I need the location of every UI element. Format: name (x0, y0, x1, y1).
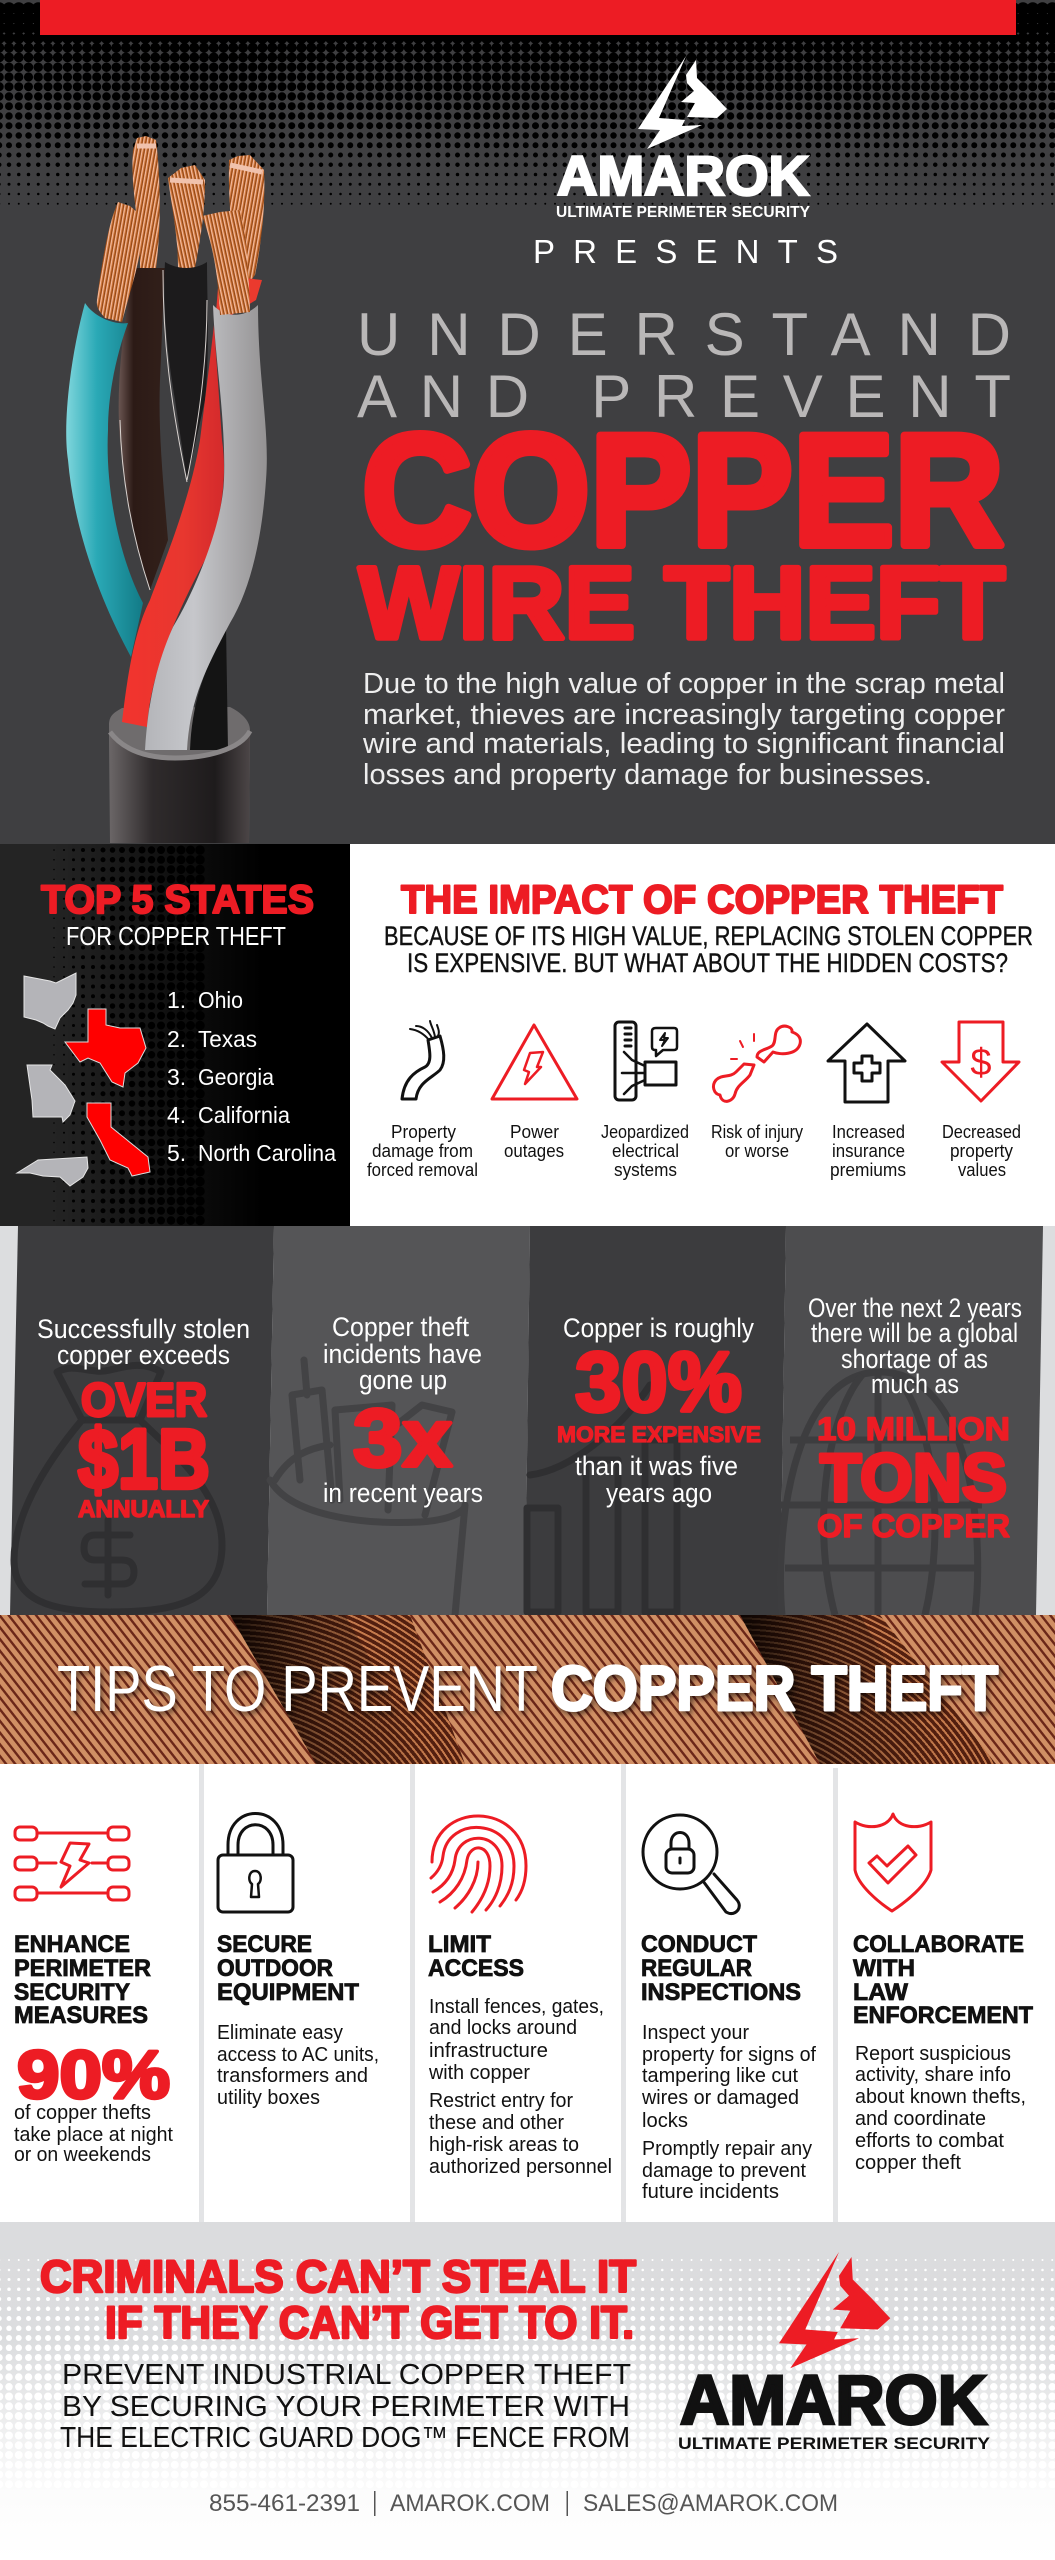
tip 2 heading (217, 1931, 359, 2006)
stat column 1: stolen copper (10, 1226, 274, 1615)
panel: the impact of copper theft (350, 844, 1055, 1226)
banner: tips to prevent copper theft (0, 1615, 1055, 1764)
stat text: incidents: 3x (353, 1393, 452, 1484)
stat text: incidents: Copper theft (332, 1312, 469, 1342)
tip 5 body: and coordinate (855, 2108, 986, 2130)
intro paragraph: losses and property damage for businesses. (363, 759, 932, 791)
stat text: stolen copper: copper exceeds (57, 1340, 230, 1370)
stat text: shortage: much as (871, 1369, 959, 1399)
logo: AMAROK white (556, 56, 810, 221)
title line: wire theft: WIRE THEFT (359, 546, 1005, 660)
tip 4 body: property for signs of (642, 2044, 816, 2066)
icon: property value down arrow: $ (970, 1042, 992, 1084)
tip 2 heading: EQUIPMENT (217, 1979, 359, 2006)
tip 3 body: infrastructure (429, 2040, 548, 2062)
banner title: bold part: COPPER THEFT (551, 1654, 998, 1724)
tip 4 body: future incidents (642, 2181, 779, 2203)
call to action text: THE ELECTRIC GUARD DOG™ FENCE FROM (60, 2422, 630, 2454)
stat text: stolen copper: Successfully stolen (37, 1314, 250, 1344)
icon: property value down arrow (942, 1022, 1019, 1101)
ranked state list: 5. (167, 1140, 186, 1166)
icon: fingerprint (431, 1816, 526, 1912)
tip 5 body: activity, share info (855, 2064, 1011, 2086)
illustration: copper cable with stripped wires (66, 136, 267, 843)
tip 1 heading: MEASURES (14, 2002, 148, 2029)
stat text: shortage: TONS (820, 1440, 1007, 1516)
stat column 2: incidents (267, 1226, 530, 1615)
tip 3 heading: ACCESS (428, 1955, 524, 1982)
background icon: money bag (14, 1365, 222, 1612)
tip 3 body: with copper (428, 2062, 530, 2084)
stat column 4: shortage (780, 1226, 1043, 1615)
stat text: incidents (323, 1312, 483, 1508)
tip 1 heading: PERIMETER (14, 1955, 151, 1982)
impact labels (367, 1122, 1021, 1180)
impact labels: electrical (612, 1141, 679, 1161)
ranked state list: 1. (167, 987, 186, 1013)
banner title: light part: TIPS TO PREVENT (57, 1652, 538, 1725)
stat text: stolen copper: $1B (78, 1412, 210, 1506)
tip 3 body: high-risk areas to (429, 2134, 579, 2156)
logo icon: red wolf and bolt (779, 2252, 890, 2368)
tip 1 heading: SECURITY (14, 1979, 130, 2006)
icon: electric fence (15, 1827, 129, 1900)
ranked state list: California (198, 1102, 290, 1128)
tip 5 heading: LAW (853, 1979, 908, 2006)
stat text: stolen copper: ANNUALLY (78, 1496, 209, 1523)
tip 3 body: and locks around (429, 2017, 577, 2039)
headline: criminals can't steal it: CRIMINALS CAN’T STEAL IT (40, 2251, 636, 2302)
impact labels: Increased (832, 1122, 905, 1142)
contact details: AMAROK.COM (390, 2490, 550, 2517)
tip 2 body: transformers and (217, 2065, 368, 2087)
title line: copper: COPPER (362, 401, 1004, 579)
icon: insurance premium up arrow (828, 1024, 905, 1102)
top red bar (40, 0, 1016, 35)
stat column 3: price (525, 1226, 786, 1615)
tip 5 body (855, 2043, 1026, 2174)
intro paragraph (362, 668, 1005, 791)
tip 1: perimeter security (14, 1827, 173, 2166)
intro paragraph: Due to the high value of copper in the scrap metal (363, 668, 1005, 700)
tip 4 heading (641, 1931, 801, 2006)
tip 4 body: locks (642, 2110, 688, 2132)
subheading: for copper theft: FOR COPPER THEFT (66, 921, 286, 951)
tip 2 body: Eliminate easy (217, 2022, 343, 2044)
title (357, 301, 1011, 660)
headline: criminals can't steal it: IF THEY CAN’T GET TO IT. (105, 2297, 634, 2348)
panel: statistics band (0, 1226, 1055, 1616)
tip 3 heading: LIMIT (428, 1931, 491, 1958)
title line: understand: UNDERSTAND (357, 301, 1011, 368)
impact labels: insurance (832, 1141, 905, 1161)
logo wordmark: AMAROK (557, 144, 809, 207)
tip 5: law enforcement (853, 1814, 1033, 2174)
panel: five tips (0, 1764, 1055, 2222)
logo wordmark: AMAROK (680, 2361, 987, 2439)
panel: call to action footer (0, 2222, 1055, 2560)
tip 4 heading: INSPECTIONS (641, 1979, 801, 2006)
icon: power outage triangle (492, 1025, 577, 1099)
headline: criminals can't steal it (40, 2251, 636, 2348)
tip 5 body: copper theft (855, 2152, 961, 2174)
intro paragraph: market, thieves are increasingly targeting copper (363, 699, 1005, 731)
call to action text: BY SECURING YOUR PERIMETER WITH (62, 2391, 630, 2423)
tip 3 body: Install fences, gates, (429, 1996, 604, 2018)
tip 5 body: about known thefts, (855, 2086, 1026, 2108)
impact labels: forced removal (367, 1160, 478, 1180)
ranked state list: Texas (198, 1026, 257, 1052)
heading: top 5 states: TOP 5 STATES (41, 878, 314, 922)
map: North Carolina (17, 1157, 88, 1186)
presents label: PRESENTS (533, 233, 838, 270)
stat text: price: 30% (575, 1335, 742, 1429)
logo tagline: ULTIMATE PERIMETER SECURITY (556, 204, 810, 221)
ranked state list: 4. (167, 1102, 186, 1128)
map: California (87, 1103, 150, 1176)
stat text: price: MORE EXPENSIVE (557, 1422, 761, 1447)
stat text: incidents: gone up (359, 1365, 447, 1395)
tip 3 heading (428, 1931, 524, 1982)
tip 1 body: take place at night (14, 2124, 173, 2146)
intro paragraph: wire and materials, leading to significant financial (362, 728, 1005, 760)
impact labels: Property (391, 1122, 456, 1142)
tip 5 body: efforts to combat (855, 2130, 1004, 2152)
map: Georgia (27, 1065, 75, 1122)
tip 1 body (14, 2102, 173, 2166)
background icon: rising bar chart (527, 1385, 677, 1612)
stat text: price: years ago (606, 1478, 712, 1508)
impact labels: premiums (830, 1160, 906, 1180)
tip 2 body: access to AC units, (217, 2044, 379, 2066)
impact labels: values (958, 1160, 1006, 1180)
panel: top 5 states (0, 844, 350, 1226)
icon: padlock (218, 1814, 293, 1912)
logo icon: wolf and bolt (638, 56, 727, 149)
ranked state list: North Carolina (198, 1140, 336, 1166)
tip 5 heading (853, 1931, 1033, 2029)
impact labels: Jeopardized (601, 1122, 689, 1142)
tip 2 heading: OUTDOOR (217, 1955, 333, 1982)
tip 3: limit access (428, 1816, 612, 2178)
tip 4 body: damage to prevent (642, 2160, 806, 2182)
stat text: price (557, 1313, 761, 1508)
ranked state list: 2. (167, 1026, 186, 1052)
tip 3 body: these and other (429, 2112, 564, 2134)
tip 1 heading (14, 1931, 151, 2029)
impact labels: Decreased (942, 1122, 1021, 1142)
tip 1 body: of copper thefts (14, 2102, 151, 2124)
stat text: stolen copper (37, 1314, 250, 1523)
call to action text: PREVENT INDUSTRIAL COPPER THEFT (62, 2359, 631, 2391)
tip 3 body: authorized personnel (429, 2156, 612, 2178)
stat text: incidents: incidents have (323, 1339, 482, 1369)
impact labels: Risk of injury (711, 1122, 803, 1142)
impact labels: or worse (725, 1141, 789, 1161)
tip 4: inspections (641, 1815, 816, 2203)
ranked state list (167, 987, 336, 1166)
call to action text (60, 2359, 631, 2454)
heading: the impact of copper theft: THE IMPACT OF COPPER THEFT (401, 878, 1003, 922)
tip 2 body: utility boxes (217, 2087, 320, 2109)
logo: AMAROK red and black (678, 2252, 991, 2453)
stat text: shortage: OF COPPER (817, 1508, 1010, 1544)
icon: broken bone (713, 1026, 800, 1101)
map: Ohio (24, 973, 76, 1029)
tip 2: outdoor equipment (217, 1814, 379, 2109)
impact labels: systems (614, 1160, 677, 1180)
tip 4 heading: REGULAR (641, 1955, 752, 1982)
contact details (209, 2490, 838, 2517)
tip 5 body: Report suspicious (855, 2043, 1011, 2065)
ranked state list: Ohio (198, 987, 243, 1013)
tip 5 heading: WITH (853, 1955, 915, 1982)
impact labels: Power (510, 1122, 559, 1142)
icon: magnifier with lock (643, 1815, 739, 1914)
stat text: stolen copper: OVER (81, 1373, 207, 1426)
impact labels: outages (504, 1141, 564, 1161)
stat text: price: Copper is roughly (563, 1313, 754, 1343)
subheading: hidden costs (384, 921, 1033, 978)
tip 4 body: wires or damaged (641, 2087, 799, 2109)
tip 4 body: Promptly repair any (642, 2138, 812, 2160)
icon: shield with check (855, 1814, 931, 1911)
impact labels: property (950, 1141, 1013, 1161)
background icon: wire bundle (270, 1360, 465, 1615)
tip 4 body (641, 2022, 816, 2203)
tip 3 body: Restrict entry for (429, 2090, 573, 2112)
tip 5 heading: ENFORCEMENT (853, 2002, 1033, 2029)
tip 4 body: tampering like cut (642, 2065, 798, 2087)
contact details: 855-461-2391 (209, 2490, 360, 2517)
panel: hero header (0, 0, 1055, 844)
stat text: shortage: 10 MILLION (817, 1411, 1010, 1447)
icon: electrical systems (615, 1022, 677, 1100)
ranked state list: 3. (167, 1064, 186, 1090)
logo tagline: ULTIMATE PERIMETER SECURITY (678, 2434, 991, 2453)
tip 3 body (428, 1996, 612, 2178)
tip 2 body (217, 2022, 379, 2109)
tip 1 body: or on weekends (14, 2144, 151, 2166)
tip 5 heading: COLLABORATE (853, 1931, 1024, 1958)
stat text: incidents: in recent years (323, 1478, 483, 1508)
map: Texas (65, 1009, 146, 1087)
contact details: SALES@AMAROK.COM (583, 2490, 838, 2517)
background icon: globe (780, 1372, 982, 1615)
icon: damaged wire (402, 1021, 444, 1099)
impact labels: damage from (372, 1141, 473, 1161)
tip 1 heading: ENHANCE (14, 1931, 130, 1958)
tip 2 heading: SECURE (217, 1931, 312, 1958)
tip 4 body: Inspect your (642, 2022, 749, 2044)
ranked state list: Georgia (198, 1064, 274, 1090)
stat text: shortage: shortage of as (841, 1344, 988, 1374)
stat text: shortage (808, 1293, 1022, 1544)
tip 4 heading: CONDUCT (641, 1931, 757, 1958)
stat text: price: than it was five (575, 1451, 738, 1481)
statistic: 90%: 90% (17, 2037, 170, 2113)
stat text: shortage: there will be a global (811, 1318, 1018, 1348)
title line: and prevent: AND PREVENT (357, 363, 1011, 430)
